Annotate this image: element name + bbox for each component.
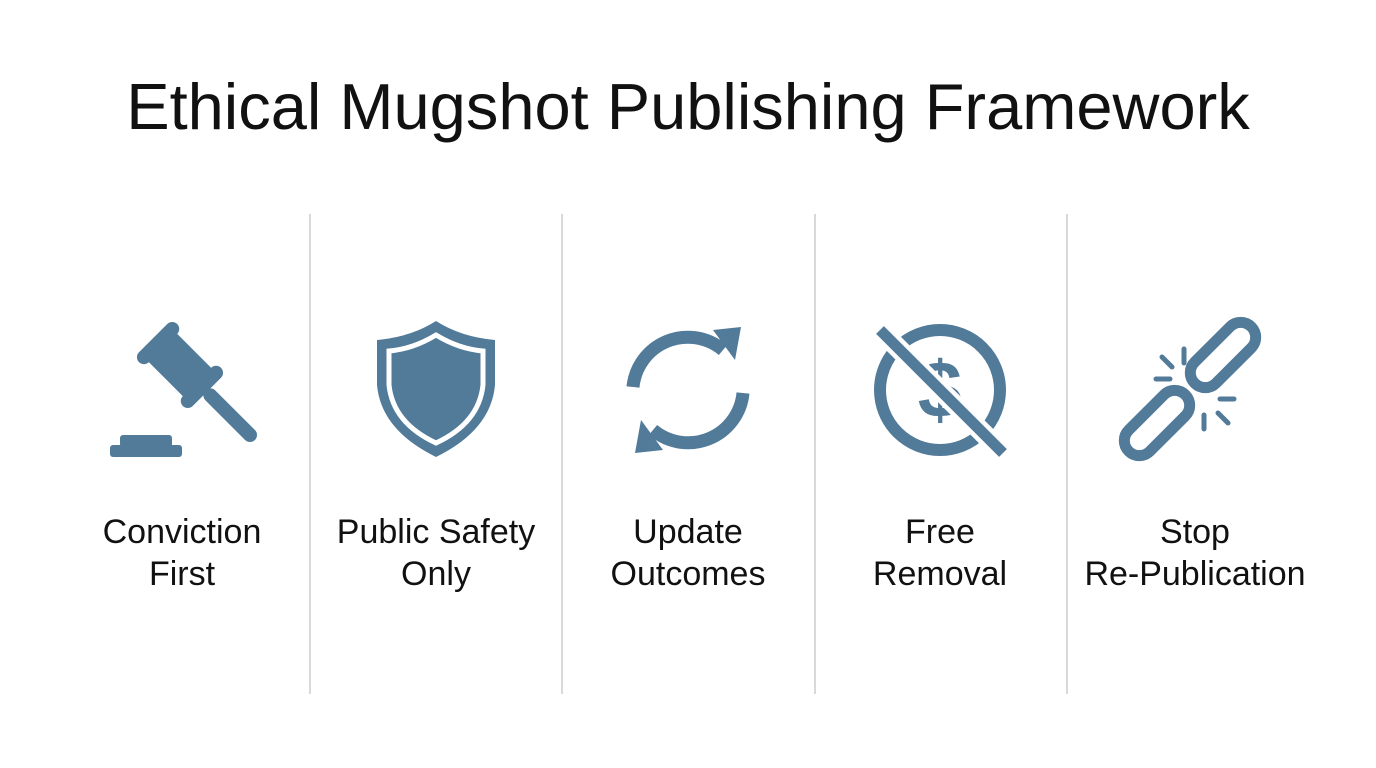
icon: gavel (110, 322, 257, 457)
icon: no money (874, 324, 1007, 457)
label: conviction first (103, 513, 261, 593)
label: public safety only (337, 513, 536, 593)
icon: broken chain (1118, 316, 1262, 462)
label: update outcomes (611, 513, 765, 593)
icon: shield (377, 321, 495, 457)
label: stop re-publication: Stop (1160, 513, 1230, 551)
label: free removal (873, 513, 1007, 593)
title: Ethical Mugshot Publishing Framework (126, 70, 1250, 143)
label: stop re-publication: Re-Publication (1084, 555, 1306, 593)
label: update outcomes: Outcomes (611, 555, 765, 593)
icon: no money: $ (918, 345, 962, 434)
label: free removal: Free (905, 513, 975, 551)
label: public safety only: Only (401, 555, 471, 593)
label: conviction first: First (149, 555, 215, 593)
icon: refresh arrows (626, 327, 750, 453)
label: stop re-publication (1084, 513, 1306, 593)
label: public safety only: Public Safety (337, 513, 535, 551)
label: free removal: Removal (873, 555, 1007, 593)
label: update outcomes: Update (633, 513, 743, 551)
label: conviction first: Conviction (103, 513, 261, 551)
